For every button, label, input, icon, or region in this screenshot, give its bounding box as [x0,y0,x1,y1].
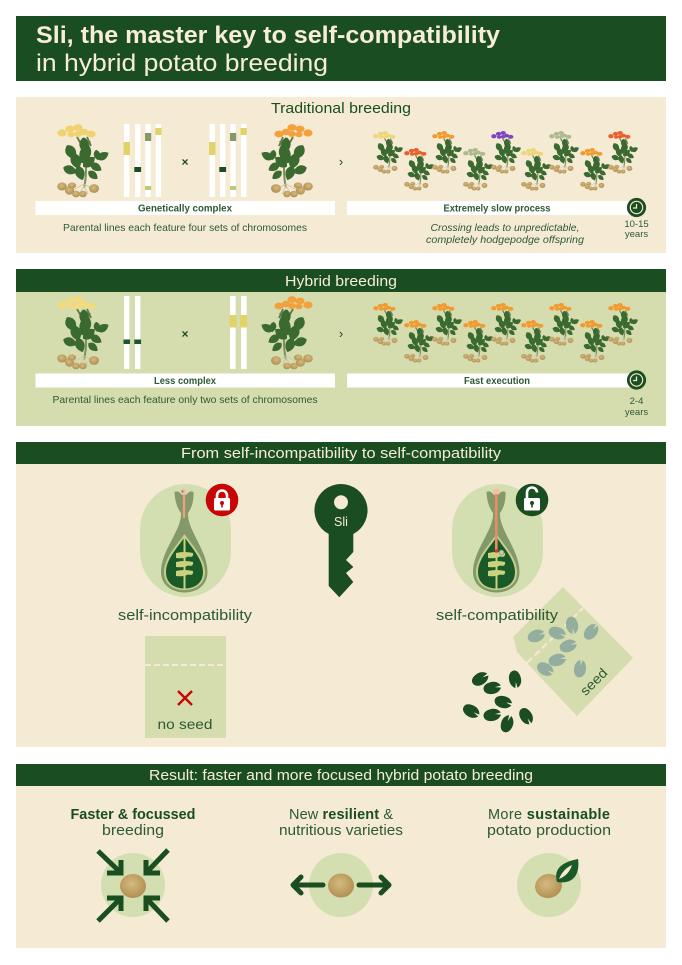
heading: result [16,764,666,786]
heading: from self-incompatibility: From self-incompatibility to self-compatibility [181,446,502,462]
parent plant yellow [57,296,110,369]
text: 10-15 years: years [625,229,648,240]
title banner: Sli, the master key to self-compatibility [36,22,501,49]
text: 2-4 years: 2-4 [630,396,643,407]
text: 10-15 years [624,219,649,240]
key: Sli [314,484,368,597]
parent plant yellow [57,124,110,197]
packet: seed [513,587,633,716]
panel: traditional breeding [16,97,666,253]
text: new resilient: nutritious varieties [279,823,403,839]
arrow: › [339,154,343,169]
cross symbol: × [181,327,189,341]
text: new resilient: New resilient & [289,807,393,823]
text: faster and focussed: breeding [102,823,164,839]
packet: no seed: no seed [158,717,212,732]
chromosomes parent one [124,124,162,197]
text: more sustainable: More sustainable [488,807,610,823]
heading: hybrid breeding: Hybrid breeding [285,273,397,290]
text: parental lines two sets: Parental lines each feature only two sets of chromosomes [52,394,318,406]
key: Sli: Sli [334,515,348,529]
heading: from self-incompatibility [16,442,666,464]
panel: result [16,764,666,948]
text: hodgepodge offspring: Crossing leads to unpredictable, [430,222,580,234]
chromosomes parent one [124,296,141,369]
text: faster and focussed [70,807,196,839]
label: extremely slow process [347,201,632,215]
label: self-compatibility: self-compatibility [436,608,559,624]
text: 2-4 years: years [625,407,648,418]
chromosomes parent two [230,296,247,369]
offspring plants [373,131,639,191]
heading: traditional breeding: Traditional breeding [271,100,411,117]
packet: no seed [145,636,226,738]
parent plant orange [260,124,313,197]
panel: self-compatibility [16,442,666,747]
label: self-incompatibility: self-incompatibility [118,608,253,624]
packet: seed: seed [577,665,610,698]
label: less complex: Less complex [154,376,216,387]
text: 10-15 years: 10-15 [624,219,649,230]
text: faster and focussed: Faster & focussed [70,807,196,823]
text: more sustainable: potato production [487,823,611,839]
icon: clock [627,370,646,390]
text: 2-4 years [625,396,648,418]
title banner [16,16,666,81]
heading: result: Result: faster and more focused hybrid potato breeding [149,768,533,784]
label: less complex [36,374,335,388]
label: genetically complex [36,201,335,215]
text: new resilient [279,807,403,839]
panel: hybrid breeding [16,269,666,426]
cross symbol: × [181,155,189,169]
icon: potato with leaf [517,853,581,917]
offspring plants [373,303,639,363]
label: fast execution [347,374,632,388]
title banner: in hybrid potato breeding [36,50,328,77]
heading: hybrid breeding [16,269,666,292]
arrow: › [339,326,343,341]
icon: closed red lock [206,484,238,516]
label: extremely slow process: Extremely slow process [444,204,551,214]
pistil: self-compatible [452,484,543,597]
chromosomes parent two [209,124,247,197]
label: fast execution: Fast execution [464,376,530,387]
label: genetically complex: Genetically complex [138,204,232,214]
text: hodgepodge offspring: completely hodgepodge offspring [426,234,584,246]
text: hodgepodge offspring [426,222,584,246]
text: parental lines four sets: Parental lines each feature four sets of chromosomes [63,222,307,234]
icon: clock [627,198,646,217]
icon: diverging arrows [293,853,389,917]
parent plant orange [260,296,313,369]
text: more sustainable [487,807,611,839]
icon: converging arrows [98,850,168,921]
loose seeds [461,669,536,734]
pistil: self-incompatible [140,484,231,597]
icon: open green lock [516,484,548,516]
